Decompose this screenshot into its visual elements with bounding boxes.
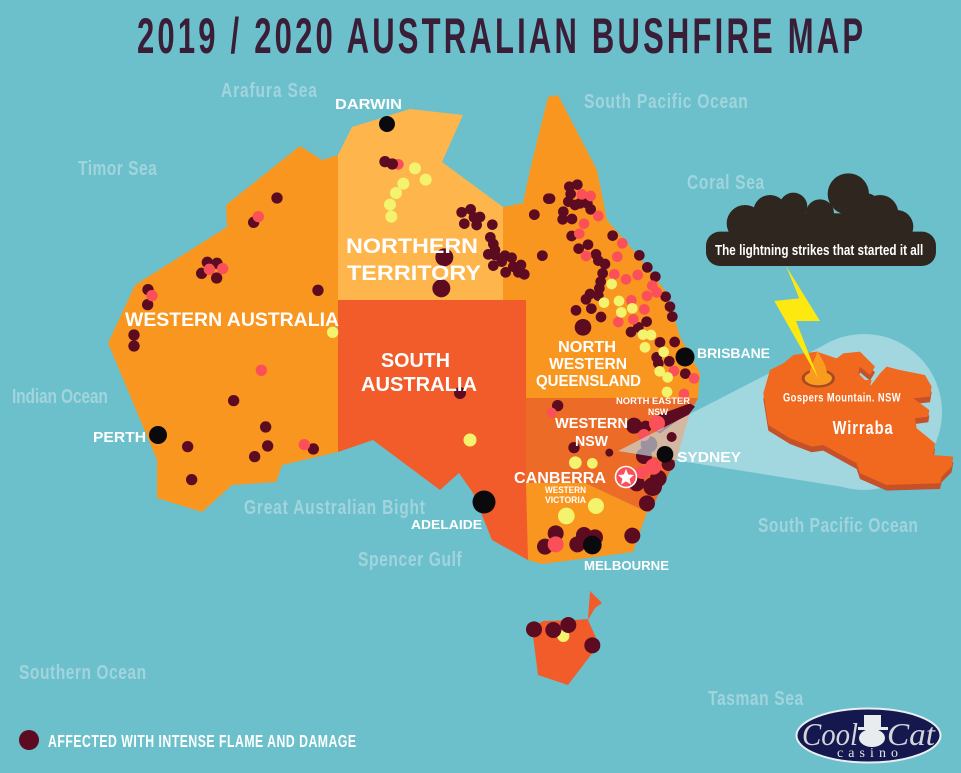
region labels: WESTERN bbox=[549, 356, 627, 373]
region labels: WESTERN bbox=[545, 485, 586, 495]
sea labels: Arafura Sea bbox=[221, 79, 318, 101]
region labels: QUEENSLAND bbox=[536, 373, 641, 390]
city labels: DARWIN bbox=[335, 96, 402, 113]
inset land shadow bbox=[763, 357, 953, 491]
inset land bbox=[763, 352, 953, 485]
logo cat mascot bbox=[858, 715, 888, 747]
region labels: NSW bbox=[575, 433, 609, 450]
region labels: SOUTH bbox=[381, 350, 450, 372]
region labels: TERRITORY bbox=[347, 262, 481, 285]
state: Queensland bbox=[503, 95, 700, 398]
sea labels: Tasman Sea bbox=[708, 687, 804, 709]
sea labels: Great Australian Bight bbox=[244, 496, 425, 518]
city labels: MELBOURNE bbox=[584, 558, 669, 573]
region labels: NORTHERN bbox=[346, 235, 478, 258]
logo: Cool Cat casino: Cat bbox=[887, 716, 936, 752]
region labels: AUSTRALIA bbox=[361, 374, 477, 396]
sea labels: Timor Sea bbox=[78, 157, 158, 179]
sea labels: Indian Ocean bbox=[12, 385, 108, 407]
sea labels bbox=[12, 79, 918, 709]
fire dots: Northern Territory bbox=[379, 156, 554, 297]
city labels: PERTH bbox=[93, 429, 146, 446]
fire dots over beam: Sydney coast bbox=[629, 432, 677, 511]
region labels bbox=[125, 235, 690, 505]
spotlight beam to Gospers Mountain inset bbox=[618, 334, 942, 490]
logo: Cool Cat casino bbox=[796, 708, 940, 762]
state: Western Australia bbox=[108, 146, 338, 512]
title: 2019 / 2020 AUSTRALIAN BUSHFIRE MAP bbox=[137, 7, 863, 64]
city labels bbox=[93, 96, 770, 573]
state: South Australia bbox=[338, 300, 528, 560]
state: New South Wales bbox=[526, 398, 698, 512]
fire dots: New South Wales and Victoria bbox=[537, 400, 695, 555]
state: Victoria bbox=[526, 483, 647, 564]
state: Northern Territory bbox=[338, 109, 503, 300]
icon: Canberra star bbox=[616, 466, 636, 488]
city labels: BRISBANE bbox=[697, 345, 770, 361]
sea labels: Southern Ocean bbox=[19, 661, 146, 683]
sea labels: Coral Sea bbox=[687, 171, 765, 193]
storm cloud callout bbox=[706, 173, 936, 266]
legend: AFFECTED WITH INTENSE FLAME AND DAMAGE bbox=[48, 732, 356, 752]
region labels: NORTH EASTER bbox=[616, 396, 690, 407]
fire dots: Tasmania bbox=[526, 617, 600, 653]
icon: lightning bolt bbox=[774, 266, 820, 378]
city labels: SYDNEY bbox=[677, 449, 741, 466]
map of Australia bbox=[108, 95, 700, 685]
icon: fire crater and flame bbox=[802, 351, 835, 388]
logo: Cool Cat casino: casino bbox=[837, 746, 898, 761]
inset: Gospers Mountain, Wirraba bbox=[763, 266, 953, 491]
city labels: CANBERRA bbox=[514, 470, 606, 487]
region labels: WESTERN bbox=[555, 415, 628, 432]
region labels: WESTERN AUSTRALIA bbox=[125, 310, 339, 331]
fire dots: Queensland bbox=[529, 179, 699, 399]
fire dots: Western Australia bbox=[128, 192, 338, 485]
fire dots: South Australia bbox=[454, 387, 476, 446]
region labels: NORTH bbox=[558, 339, 616, 356]
city marker: Adelaide bbox=[472, 490, 496, 514]
sea labels: Spencer Gulf bbox=[358, 548, 462, 570]
city marker: Perth bbox=[149, 426, 167, 444]
city labels: ADELAIDE bbox=[411, 517, 482, 532]
logo: Cool Cat casino: Cool bbox=[802, 716, 858, 752]
sea labels: South Pacific Ocean bbox=[758, 514, 918, 536]
sea labels: South Pacific Ocean bbox=[584, 90, 748, 112]
callout text: The lightning strikes that started it all bbox=[715, 242, 923, 258]
inset region label: Wirraba bbox=[833, 417, 893, 438]
state: Tasmania bbox=[532, 591, 602, 685]
region labels: NSW bbox=[648, 407, 668, 418]
region labels: VICTORIA bbox=[545, 495, 586, 505]
city marker: Brisbane bbox=[676, 348, 694, 366]
city marker: Darwin bbox=[379, 116, 395, 132]
inset place label: Gospers Mountain. NSW bbox=[783, 392, 901, 405]
